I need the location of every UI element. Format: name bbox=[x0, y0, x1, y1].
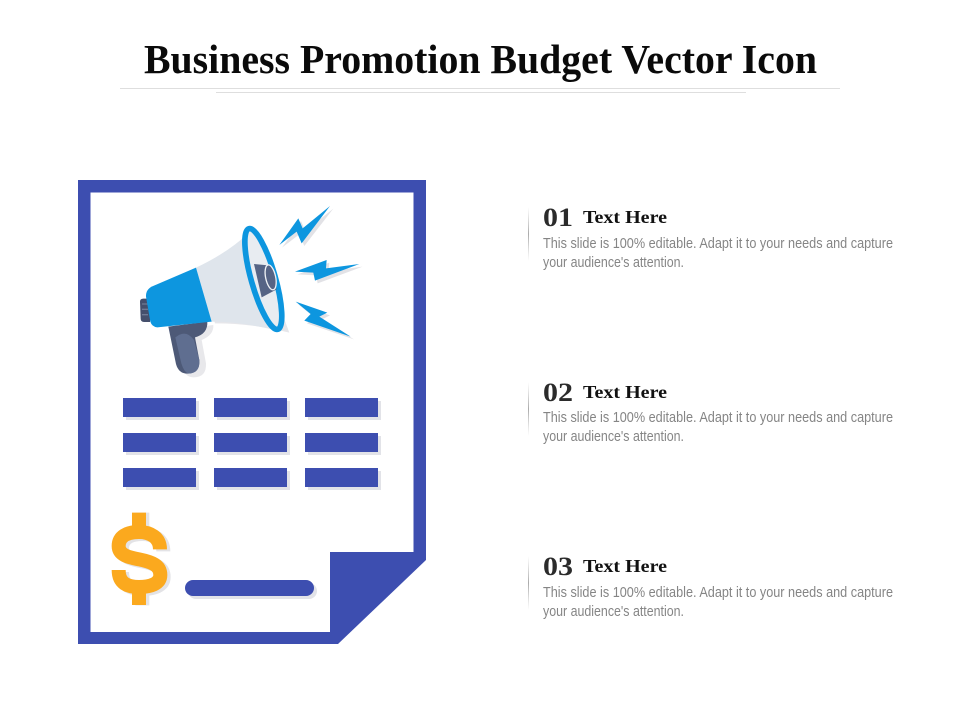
text block: item 01: 01 bbox=[543, 203, 573, 232]
text block: item 01 bbox=[528, 203, 893, 271]
text block: item 02: 02 bbox=[543, 378, 573, 407]
text block: item 02: This slide is 100% editable. Adapt it to your needs and capture bbox=[543, 409, 893, 426]
title: Business Promotion Budget Vector Icon bbox=[144, 36, 817, 82]
signature line bbox=[185, 580, 317, 599]
panel: budget document illustration bbox=[78, 180, 426, 644]
document sheet with folded corner bbox=[78, 180, 426, 644]
icon: lightning bolt bottom bbox=[296, 302, 354, 339]
text block: item 02 bbox=[528, 378, 893, 445]
icon: lightning bolt middle bbox=[295, 260, 363, 283]
table of budget rows bbox=[123, 398, 381, 490]
text block: item 03: your audience's attention. bbox=[543, 603, 684, 620]
icon: lightning bolt top bbox=[279, 206, 333, 248]
text block: item 01: your audience's attention. bbox=[543, 254, 684, 271]
icon: dollar sign bbox=[119, 513, 164, 605]
text block: item 03: 03 bbox=[543, 552, 573, 581]
text block: item 01: Text Here bbox=[583, 207, 667, 227]
icon: megaphone bbox=[140, 225, 289, 377]
text block: item 02: your audience's attention. bbox=[543, 428, 684, 445]
text block: item 03 bbox=[528, 552, 893, 620]
text block: item 03: This slide is 100% editable. Adapt it to your needs and capture bbox=[543, 584, 893, 601]
text block: item 02: Text Here bbox=[583, 382, 667, 402]
text block: item 01: This slide is 100% editable. Adapt it to your needs and capture bbox=[543, 235, 893, 252]
text block: item 03: Text Here bbox=[583, 556, 667, 576]
